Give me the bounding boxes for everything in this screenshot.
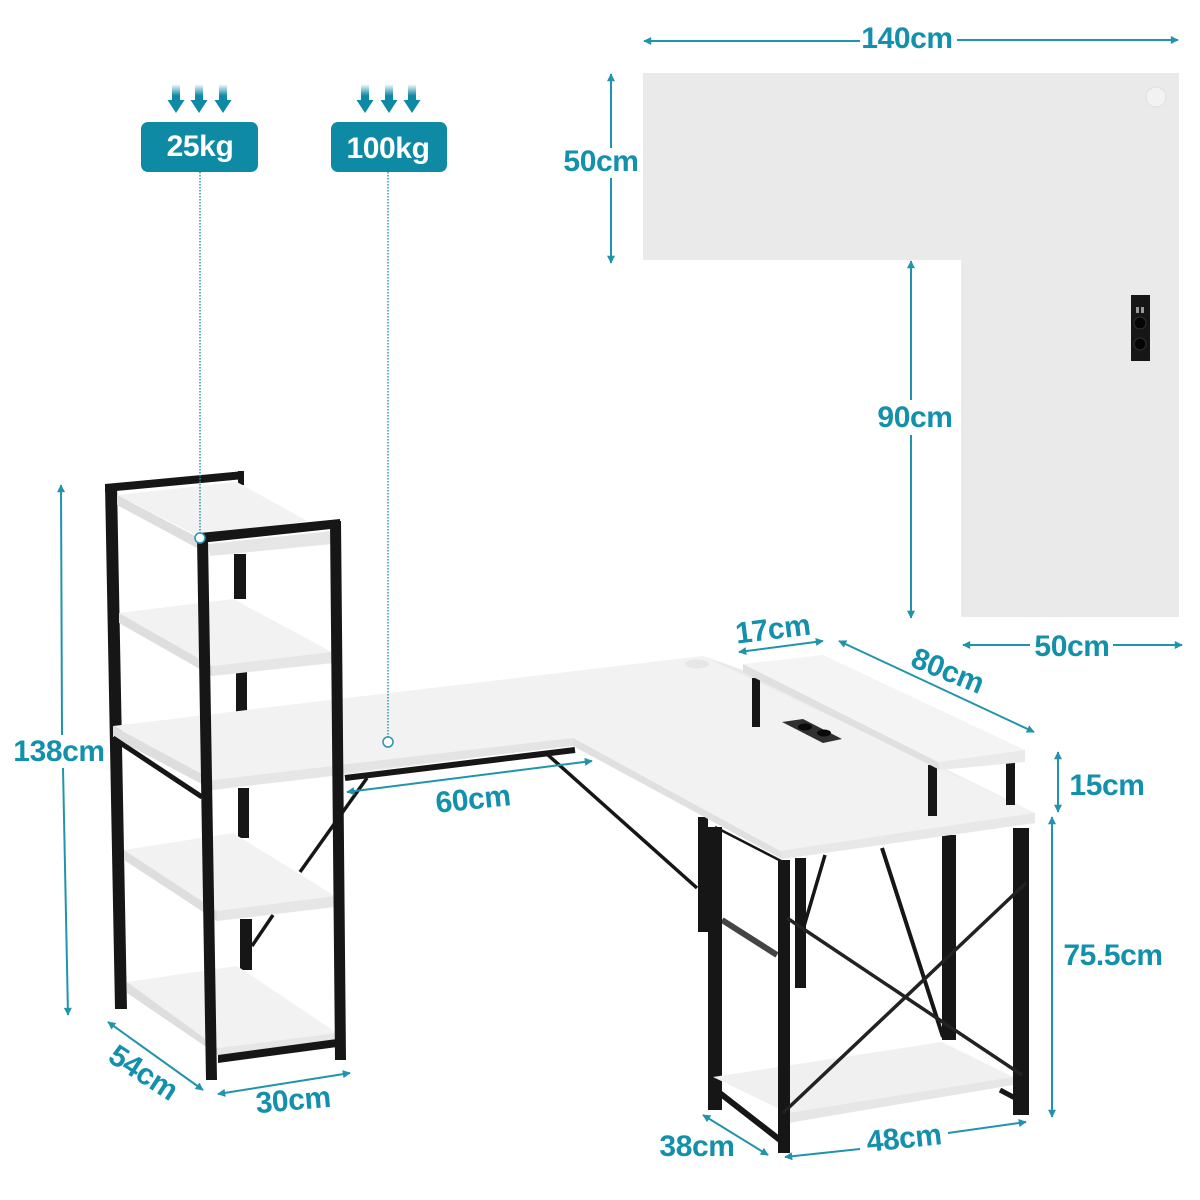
- dimension: 48cm: 48cm: [865, 1118, 943, 1159]
- icon: desk socket: [782, 719, 842, 743]
- dimension: return length 90cm: 90cm: [877, 401, 953, 434]
- dimension: 54cm: [103, 1022, 203, 1107]
- rear post and braces of bookcase: [234, 554, 367, 970]
- dimension: top width 140cm: 140cm: [861, 22, 953, 55]
- shelf 5: [127, 966, 337, 1055]
- dotted leader to desktop, 100kg: [387, 172, 389, 738]
- bookcase: [105, 471, 346, 1080]
- dimension: 17cm: 17cm: [734, 609, 812, 651]
- dimension: 30cm: 30cm: [254, 1081, 332, 1120]
- dimension: 15cm: [1058, 752, 1145, 812]
- back frame: [105, 471, 244, 1009]
- top view of L-shaped desk: [643, 73, 1179, 617]
- dotted leader to shelf, 25kg: [199, 172, 201, 534]
- shelf 3: [113, 704, 332, 797]
- load badge: 100kg: [331, 84, 447, 172]
- dimension: 60cm: 60cm: [434, 779, 512, 820]
- icon: power socket: [1131, 295, 1150, 361]
- load badge: 25kg: 25kg: [167, 130, 233, 163]
- dimension: top depth 50cm: 50cm: [563, 145, 639, 178]
- icon: desktop grommet: [685, 660, 709, 668]
- dimension: 80cm: 80cm: [907, 642, 989, 701]
- dimension: 38cm: 38cm: [659, 1130, 735, 1163]
- dimension: 138cm: [13, 485, 105, 1015]
- load point markers: [195, 533, 393, 747]
- front frame: [197, 519, 346, 1080]
- dimension: 75.5cm: 75.5cm: [1063, 939, 1163, 972]
- desk rear legs and braces: [345, 750, 956, 1040]
- dimension: 60cm: [347, 761, 592, 820]
- desk front legs, lower shelf and cross braces: [708, 827, 1029, 1153]
- dimension: 38cm: [659, 1115, 768, 1163]
- dimension: 15cm: 15cm: [1069, 769, 1145, 802]
- dimension: 30cm: [218, 1073, 350, 1120]
- load badge: 100kg: 100kg: [346, 132, 430, 165]
- monitor riser: [743, 655, 1025, 816]
- lower shelf: [713, 1042, 1013, 1123]
- dimension: 138cm: 138cm: [13, 735, 105, 768]
- shelf 1: [117, 482, 332, 556]
- shelf 4: [124, 833, 335, 921]
- L-shaped desktop in perspective: [247, 656, 1035, 859]
- dimension: 80cm: [839, 641, 1034, 732]
- shelf 2: [119, 599, 333, 676]
- load badge: 25kg: [141, 84, 258, 172]
- dimension: return width 50cm: 50cm: [1034, 630, 1110, 663]
- dimension: 48cm: [785, 1118, 1026, 1159]
- dimension: 54cm: 54cm: [103, 1039, 184, 1107]
- icon: cable grommet: [1146, 87, 1166, 107]
